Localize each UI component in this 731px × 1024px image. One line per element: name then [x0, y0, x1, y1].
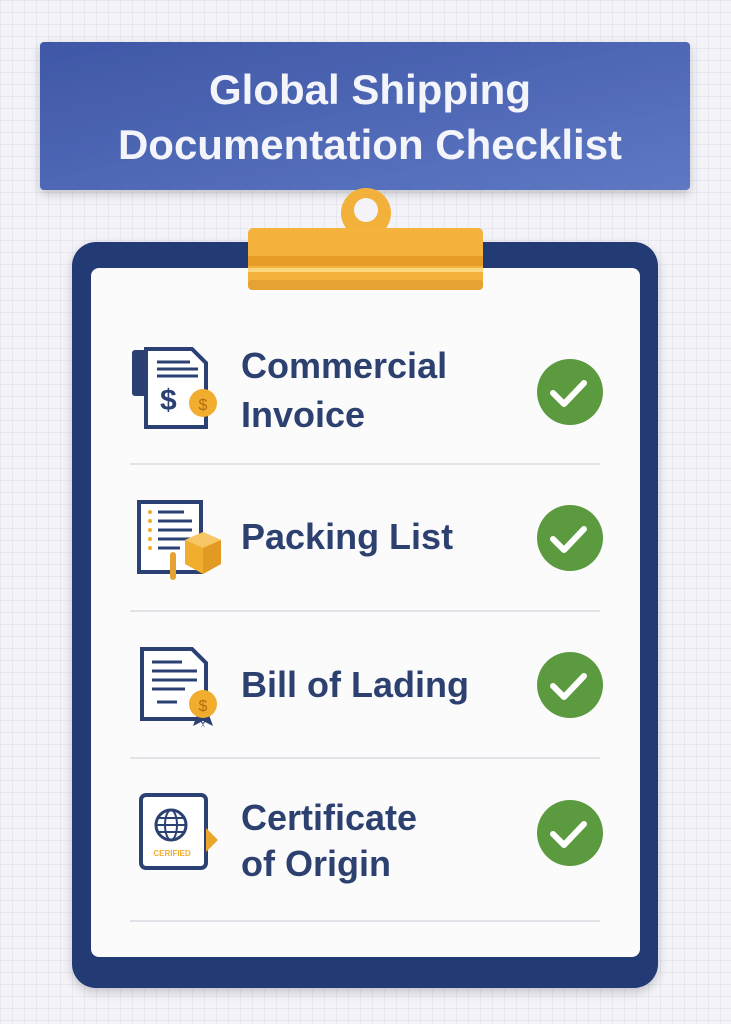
check — [537, 359, 603, 425]
title banner: Documentation Checklist — [118, 121, 622, 168]
check — [537, 800, 603, 866]
item: Bill of Lading — [142, 649, 603, 728]
title banner: Global Shipping — [209, 66, 531, 113]
item: Commercial Invoice — [132, 345, 603, 435]
title banner — [40, 42, 690, 190]
item: Bill of Lading: Bill of Lading — [241, 664, 469, 705]
icon: certificate: CERIFIED — [153, 849, 191, 858]
item: Certificate of Origin: Certificate — [241, 797, 417, 838]
item: Certificate of Origin — [141, 795, 603, 884]
check — [537, 505, 603, 571]
clip — [248, 188, 483, 290]
item: Packing List — [139, 502, 603, 580]
item: Commercial Invoice: Invoice — [241, 394, 365, 435]
icon: packing list — [139, 502, 221, 580]
item: Certificate of Origin: of Origin — [241, 843, 391, 884]
icon: invoice — [132, 349, 217, 427]
icon: bill of lading — [142, 649, 217, 728]
icon: certificate — [141, 795, 218, 868]
icon: invoice: $ — [160, 384, 177, 417]
icon: bill of lading: $ — [199, 698, 208, 715]
item: Commercial Invoice: Commercial — [241, 345, 447, 386]
clipboard board — [72, 242, 658, 988]
item: Packing List: Packing List — [241, 516, 453, 557]
icon: invoice: $ — [199, 397, 208, 414]
check — [537, 652, 603, 718]
